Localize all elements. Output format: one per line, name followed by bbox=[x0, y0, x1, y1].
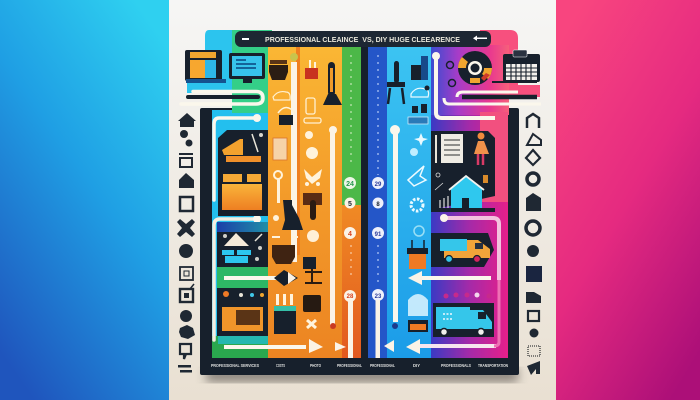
cyan column rail bbox=[390, 125, 400, 329]
orange column icons top bbox=[269, 60, 342, 205]
left black panel: house bbox=[217, 222, 268, 267]
icon: monitor bbox=[229, 53, 265, 83]
icon: dotted grid bbox=[528, 346, 540, 356]
icon: gear wheel bbox=[446, 51, 492, 86]
orange column tall rails bbox=[290, 53, 356, 358]
icon: cross bbox=[177, 219, 195, 237]
dotted lines and number badges left bbox=[344, 55, 356, 300]
right black panel: document and person bbox=[431, 131, 495, 210]
lower long arrow bbox=[224, 339, 346, 353]
icon: gear dot bbox=[179, 244, 193, 258]
icon: diamond bbox=[526, 150, 540, 165]
dotted lines and number badges left: 4 bbox=[348, 231, 352, 238]
right gradient panel bbox=[556, 0, 700, 400]
icon: navy square bbox=[526, 266, 542, 282]
icon: framed dark square bbox=[180, 284, 194, 302]
right black panel: blue truck bbox=[433, 303, 494, 337]
icon: calendar bbox=[492, 50, 540, 83]
title text: PROFESSIONAL CLEAINCE VS, DIY HUGE CLEEARENCE bbox=[265, 35, 460, 44]
row of stars bbox=[444, 292, 492, 298]
icon: camera circle bbox=[527, 173, 539, 185]
column: cyan bbox=[387, 45, 431, 358]
icon: home bbox=[178, 113, 196, 127]
dotted lines and number badges right bbox=[372, 55, 384, 358]
left black panel: furniture and box bbox=[218, 130, 268, 216]
footer labels: COSTS bbox=[276, 363, 285, 369]
footer labels bbox=[211, 363, 508, 369]
column: orange bbox=[268, 45, 343, 358]
centre divider bbox=[361, 45, 368, 360]
icon: archway bbox=[527, 114, 539, 128]
main infographic board bbox=[181, 30, 541, 375]
icon: square frame bbox=[528, 311, 539, 321]
top colour tabs bbox=[187, 30, 540, 120]
icon: envelope diamond bbox=[179, 173, 194, 188]
footer labels: DIY bbox=[413, 363, 421, 369]
icon: cog bbox=[180, 310, 192, 322]
icon: gears bbox=[180, 130, 192, 146]
left gradient panel bbox=[0, 0, 169, 400]
icon: folded card bbox=[526, 193, 541, 211]
icon: lines bbox=[178, 365, 192, 372]
cyan column arrows bbox=[384, 271, 496, 354]
left icon column bbox=[177, 113, 196, 372]
header bar bbox=[235, 31, 491, 47]
right connector arrows bbox=[432, 52, 541, 346]
icon: folder bbox=[526, 292, 541, 303]
dotted lines and number badges left: 28 bbox=[347, 294, 354, 300]
icon: small gear bbox=[530, 328, 538, 338]
column: green to red orange bbox=[342, 45, 361, 358]
dotted lines and number badges right: 23 bbox=[375, 294, 382, 300]
icon: virus gear bbox=[527, 245, 539, 257]
right black panel: orange truck bbox=[431, 233, 494, 267]
dotted lines and number badges right: 8 bbox=[376, 202, 380, 208]
icon: film window bbox=[185, 50, 226, 83]
dotted lines and number badges right: 91 bbox=[375, 232, 382, 238]
icon: house bbox=[431, 173, 495, 212]
green band with arrow bbox=[217, 267, 298, 288]
icon: flag tool bbox=[527, 361, 540, 375]
cyan column icons bbox=[387, 56, 430, 332]
orange column icons bottom bbox=[272, 200, 322, 334]
black frame bbox=[200, 108, 519, 375]
icon: blob bbox=[179, 325, 195, 339]
left connector arrows bbox=[181, 92, 263, 340]
footer labels: PROFESSIONALS bbox=[441, 363, 472, 369]
column: blue bbox=[368, 45, 387, 358]
icon: case bbox=[180, 197, 193, 211]
dotted lines and number badges left: 24 bbox=[346, 181, 354, 188]
dotted lines and number badges left: 5 bbox=[348, 201, 352, 208]
footer labels: TRANSPORTATION bbox=[478, 363, 508, 369]
column: left blue and green bbox=[212, 45, 268, 358]
dotted lines and number badges right: 29 bbox=[375, 182, 382, 188]
footer labels: PHOTO bbox=[310, 363, 321, 369]
footer labels: PROFESSIONAL bbox=[337, 363, 362, 369]
icon: speech sign bbox=[180, 344, 191, 359]
icon: roof tray bbox=[527, 134, 541, 145]
footer labels: PROFESSIONAL SERVICES bbox=[211, 363, 260, 369]
column: purple to pink bbox=[431, 45, 509, 358]
centre paper background bbox=[169, 0, 556, 400]
board shadow bbox=[206, 368, 518, 382]
right icon column bbox=[526, 114, 542, 375]
icon: round ring bbox=[526, 221, 540, 235]
icon: camera box bbox=[179, 153, 193, 167]
left black panel: orange card bbox=[217, 288, 268, 336]
icon: framed square bbox=[180, 267, 193, 280]
footer labels: PROFESSIONAL bbox=[370, 363, 395, 369]
